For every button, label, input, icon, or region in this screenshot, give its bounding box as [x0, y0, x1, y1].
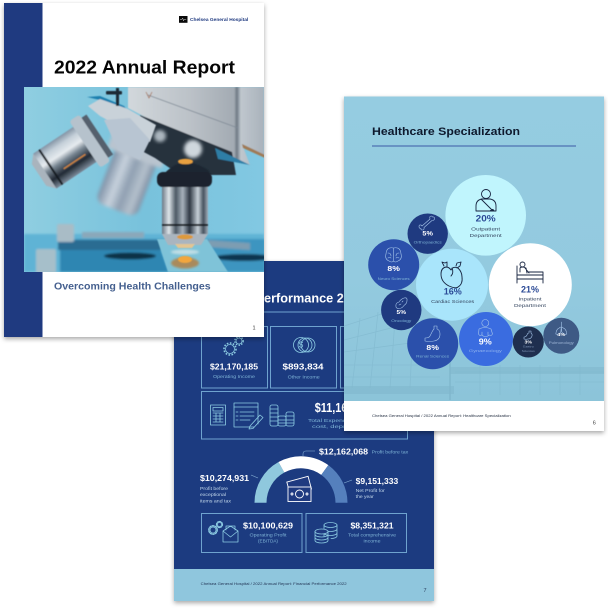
- stat box: total expenditure: cost, depreciation: [312, 424, 373, 429]
- bubble: cardiac sciences 16%: [416, 249, 488, 321]
- chart: profit gauge: [251, 451, 352, 503]
- bubble: renal sciences 8%: Renal Sciences: [416, 355, 449, 359]
- callout: profit before exceptional items: exceptional: [200, 492, 226, 497]
- callout: profit before tax: Profit before tax: [372, 450, 409, 454]
- callout: profit before exceptional items: $10,274,931: [200, 473, 249, 483]
- footer band: [174, 569, 434, 601]
- bubble: outpatient department 20%: Outpatient: [471, 226, 501, 232]
- callout: net profit: $9,151,333: [356, 476, 399, 486]
- bubble: cardiac sciences 16%: Cardiac Sciences: [431, 299, 475, 305]
- callout: profit before tax: [319, 446, 409, 456]
- stat box: total expenditure: $11,166,320: [315, 401, 375, 415]
- bubble: outpatient department 20%: 20%: [476, 213, 496, 223]
- stat box: total comprehensive income: [306, 514, 406, 552]
- bubble: pulmonology 4%: [543, 318, 579, 354]
- stat box: other income: [270, 326, 336, 388]
- panel: cover page: [4, 3, 274, 337]
- stat box: other income: Other Income: [288, 374, 320, 380]
- bubble: neuro sciences 8%: 8%: [387, 264, 400, 273]
- stat box: total expenditure: [202, 392, 408, 439]
- stat box: operating profit: (EBITDA): [258, 538, 279, 544]
- icon: invoice and pencil: [234, 403, 263, 429]
- bubble: inpatient department 21%: Department: [514, 303, 547, 309]
- stat box: third, mostly hidden: [340, 326, 408, 388]
- slide: [157, 239, 228, 272]
- stat box: total comprehensive income: income: [364, 538, 381, 544]
- page number 7: 7: [423, 588, 427, 594]
- bubble: cardiac sciences 16%: 16%: [444, 287, 462, 297]
- bubble: inpatient department 21%: Inpatient: [518, 296, 542, 302]
- bubble: oncology 5%: Oncology: [391, 319, 411, 323]
- bubble: outpatient department 20%: Department: [470, 233, 503, 239]
- stat box: operating income: [202, 326, 268, 388]
- bubble: orthopaedics 5%: Orthopaedics: [414, 241, 442, 245]
- panel: financial performance page: [174, 261, 434, 601]
- cover spine band: [4, 3, 42, 337]
- stat box: operating profit: [202, 514, 302, 552]
- bubble: outpatient department 20%: [445, 175, 526, 256]
- stat box: operating income: $21,170,185: [210, 362, 258, 372]
- stage: [24, 224, 274, 273]
- bubble: orthopaedics 5%: [408, 214, 448, 254]
- callout: net profit: the year: [356, 494, 374, 499]
- icon: banknotes: [287, 476, 311, 502]
- bubble: inpatient department 21%: 21%: [521, 284, 539, 294]
- heading: financial performance: Financial Performance 2022: [197, 290, 365, 306]
- bubble: oncology 5%: [381, 290, 421, 330]
- bubble: renal sciences 8%: 8%: [426, 343, 439, 352]
- center objective: [157, 159, 212, 248]
- left objective: [32, 114, 114, 189]
- bubble: inpatient department 21%: [489, 243, 572, 326]
- bubble: gastro sciences 3%: Gastro: [523, 345, 534, 349]
- icon: calculator: [210, 405, 226, 425]
- callout: profit before exceptional items: items and tax: [200, 498, 232, 503]
- cover subtitle: Overcoming Health Challenges: [54, 280, 211, 292]
- callout: net profit: Net Profit for: [356, 488, 385, 493]
- logo: Chelsea General Hospital: [179, 16, 248, 23]
- logo: Chelsea General Hospital: Chelsea General Hospital: [190, 17, 248, 22]
- bubble: pulmonology 4%: 4%: [557, 332, 566, 338]
- bubble: gynaecology 9%: Gynaecology: [469, 348, 502, 353]
- stat box: total expenditure: Total Expenditure on staff: [308, 418, 384, 423]
- stat box: operating income: Operating Income: [213, 374, 256, 379]
- glow: [171, 258, 199, 268]
- bubble: neuro sciences 8%: Neuro Sciences: [378, 277, 410, 281]
- photo: microscope: [24, 87, 274, 273]
- callout: net profit: [356, 476, 399, 499]
- footer text: Chelsea General Hospital / 2022 Annual Report: Financial Performance 2022: [201, 581, 347, 586]
- stat box: operating profit: Operating Profit: [250, 532, 287, 538]
- bubble: pulmonology 4%: Pulmonology: [549, 341, 574, 345]
- icon: coin stacks: [270, 405, 294, 426]
- stat box: other income: $893,834: [282, 362, 324, 372]
- bubble: gastro sciences 3%: [513, 326, 544, 358]
- stat box: total comprehensive income: Total comprehensive: [348, 532, 397, 538]
- footer text: Chelsea General Hospital / 2022 Annual Report: Healthcare Specialization: [372, 413, 511, 418]
- stat box: total comprehensive income: $8,351,321: [350, 521, 394, 531]
- heading: Healthcare Specialization: [372, 126, 520, 138]
- bubble: gastro sciences 3%: 3%: [525, 340, 532, 344]
- callout: profit before exceptional items: Profit before: [200, 486, 229, 491]
- bubble: renal sciences 8%: [407, 318, 458, 369]
- background: faint building photo: [344, 300, 604, 395]
- bubble: gynaecology 9%: [459, 312, 513, 366]
- stat box: other income: $: [299, 340, 304, 350]
- bubble: gastro sciences 3%: Sciences: [522, 349, 535, 353]
- panel: healthcare specialization page: [344, 96, 604, 431]
- callout: profit before tax: $12,162,068: [319, 446, 368, 456]
- blurred objective: [96, 135, 164, 216]
- bubble: oncology 5%: 5%: [397, 310, 406, 316]
- bubble: orthopaedics 5%: 5%: [422, 230, 433, 238]
- cover title: 2022 Annual Report: [54, 58, 235, 78]
- page number 1: 1: [252, 325, 256, 331]
- page number 6: 6: [593, 420, 596, 426]
- arm: [87, 88, 156, 160]
- bubble: neuro sciences 8%: [368, 239, 419, 290]
- callout: profit before exceptional items: [200, 473, 249, 503]
- microscope housing: [128, 87, 265, 175]
- stat box: operating profit: $10,100,629: [243, 521, 293, 531]
- bubble: gynaecology 9%: 9%: [479, 338, 492, 346]
